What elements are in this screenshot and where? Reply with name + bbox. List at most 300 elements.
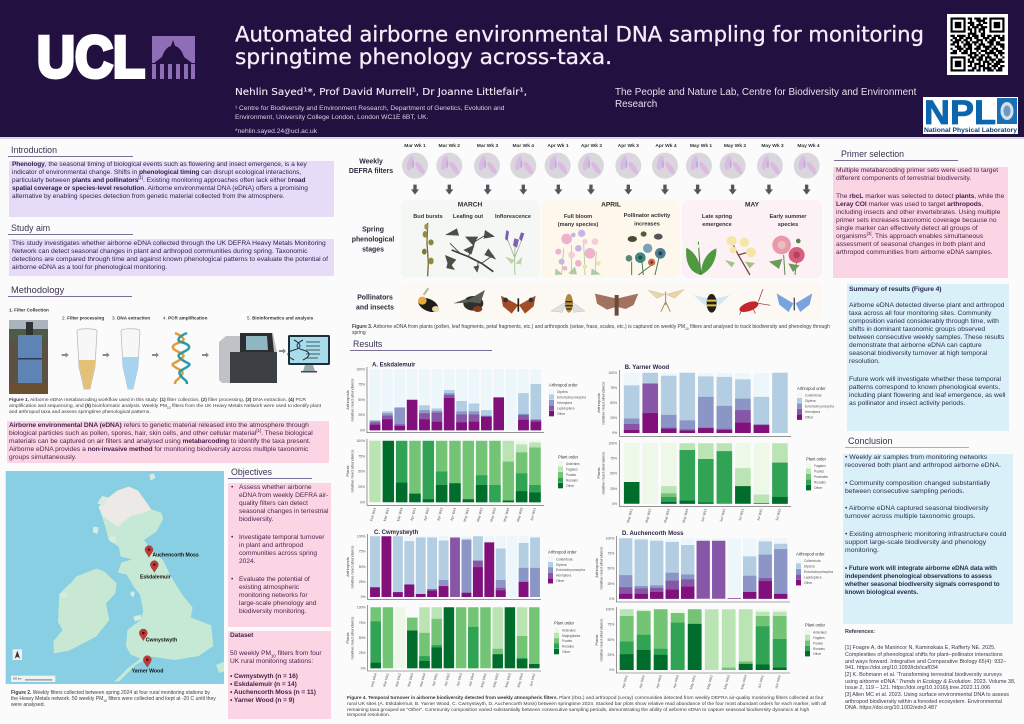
panel: dataset: Dataset <box>230 632 253 639</box>
row labels: stages <box>362 246 384 254</box>
panel: primer selection: Leray COI marker was used to target arthropods, <box>836 201 983 208</box>
tick labels B: 0% <box>612 431 617 435</box>
panel: summary of results: as pollinator and insect activity periods. <box>849 400 965 407</box>
x labels B: May Wk4 <box>682 508 689 523</box>
panel: introduction: particularly between plants and pollinators[1]. Existing monitoring approaches often lack either broad <box>12 175 305 184</box>
insect: red beetle <box>738 289 770 315</box>
legend: plant D: Fagales <box>813 636 825 640</box>
header band <box>0 0 1024 139</box>
tick labels A: 0% <box>360 428 365 432</box>
x labels A: Mar Wk1 <box>383 507 390 522</box>
panel: objectives: biodiversity monitoring. <box>239 608 306 615</box>
heading: introduction <box>8 144 133 157</box>
illustration: inflorescence <box>505 230 524 275</box>
legend: arthropod C: Diptera <box>556 563 567 567</box>
site labels: Auchencorth Moss <box>152 553 199 559</box>
affiliations <box>235 105 505 135</box>
panel: summary of results: between consecutive weekly samples. These results <box>849 334 1004 341</box>
tick labels C: 50% <box>359 565 366 569</box>
legend: plant B: Fagales <box>814 464 826 468</box>
x labels D: Apr Wk4 <box>672 675 680 689</box>
affiliations: *nehlin.sayed.24@ucl.ac.uk <box>235 128 318 135</box>
references: Complexities of phenological shifts for plant–pollinator interactions <box>845 652 1003 658</box>
legend: arthropod B: Other <box>805 416 814 420</box>
legend: arthropod D: Other <box>804 581 813 585</box>
site labels: Cwmystwyth <box>146 637 177 643</box>
tick labels B: 25% <box>610 487 617 491</box>
panel: objectives: Evaluate the potential of <box>239 576 310 583</box>
panel: airborne eDNA definition: materials can be captured on air filters and analysed using metabarcoding to identify the taxa present. <box>9 438 311 445</box>
tick labels A: 50% <box>358 398 365 402</box>
x labels C: Feb Wk4 <box>370 673 378 687</box>
y axis titles B <box>596 381 606 494</box>
heading: primer selection <box>834 148 958 161</box>
panel: objectives: Investigate temporal turnover <box>239 534 324 541</box>
panel: conclusion: support large-scale biodiversity and phenology <box>845 539 986 546</box>
month panels: increases <box>634 222 660 228</box>
arthropod bars D <box>626 538 781 599</box>
x labels C: May Wk1 <box>480 673 487 688</box>
panel: conclusion: whether seasonal biodiversity signals correspond to <box>845 581 1000 588</box>
tick labels A: 25% <box>358 485 365 489</box>
affiliations: ¹ Centre for Biodiversity and Environment Research, Department of Genetics, Evolution and <box>235 105 505 112</box>
panel: objectives: in plant and arthropod <box>239 542 303 549</box>
x labels D: May Wk2 <box>706 675 714 690</box>
legend: plant A: Asterales <box>566 462 580 466</box>
authors: Nehlin Sayed¹*, Prof David Murrell¹, Dr Joanne Littlefair¹, <box>235 87 527 98</box>
x labels B: Jun Wk1 <box>700 508 708 522</box>
x labels A: Jun Wk1 <box>530 507 537 521</box>
tick labels B: 50% <box>610 472 617 476</box>
row labels: and insects <box>356 304 394 312</box>
legend: plant C: Asterales <box>562 628 576 632</box>
week labels: May Wk 3 <box>761 143 784 149</box>
panel: conclusion: • Existing atmospheric monitoring infrastructure could <box>845 531 1006 538</box>
legend: plant C: Poales <box>562 639 572 643</box>
legend: arthropod C: Arthropod order <box>548 550 577 554</box>
month panels <box>401 200 822 320</box>
panel: conclusion: between consecutive sampling periods. <box>845 488 964 495</box>
panel: primer selection: different components of terrestrial biodiversity. <box>836 175 971 182</box>
x labels D <box>621 675 782 690</box>
panel: summary of results: Future work will investigate whether these temporal <box>849 376 1001 383</box>
y axis titles C: Plants <box>345 632 350 644</box>
site labels: Yarner Wood <box>132 668 163 674</box>
tick labels B <box>608 371 617 506</box>
NPL logo: National Physical Laboratory <box>924 127 1018 134</box>
caption: figure 4: remaining taxa grouped as "Other". Community composition varied substantially between consecutive sampling periods, demonstrating the ability of airborne eDNA to capture seasonal biodiversity dynamics at high <box>347 708 809 713</box>
references: and ways forward. Integrative and Comparative Biology 65(4): 932– <box>845 659 1006 665</box>
month panels: Pollinator activity <box>624 213 671 219</box>
y axis titles D: relative read abundance <box>598 618 604 661</box>
plant bars A <box>375 441 535 502</box>
legend: plant C <box>554 620 581 654</box>
tick labels D: 0% <box>609 597 614 601</box>
y axis titles B: Arthropods <box>596 393 601 413</box>
x labels C: May Wk4 <box>516 673 524 688</box>
legend: plant D: Other <box>813 652 822 656</box>
y axis titles D <box>594 546 604 661</box>
NPL logo: NPL <box>924 94 996 132</box>
tick labels C: 100% <box>357 606 366 610</box>
step labels <box>9 308 314 320</box>
title <box>235 22 924 69</box>
legend: plant B <box>806 456 828 490</box>
arthropod bars B <box>632 373 780 433</box>
legend: plant A: Rosales <box>566 478 578 482</box>
legend: arthropod A: Other <box>557 412 566 416</box>
panel: primer selection: including insects and other invertebrates. Using multiple <box>836 209 1000 216</box>
panel: objectives: quality filters can detect <box>239 500 308 507</box>
illustration: pollinator flowers <box>626 231 666 275</box>
panel: primer selection: assessment of seasonal changes in both plant and <box>836 241 985 248</box>
DNA helix <box>173 333 189 384</box>
affiliations: Environment, University College London, London WC1E 6BT, UK. <box>235 114 429 121</box>
row labels: Spring <box>362 226 384 234</box>
panel: summary of results: Summary of results (Figure 4) <box>849 286 941 293</box>
panel: dataset <box>228 631 331 719</box>
x labels A: Apr Wk2 <box>423 507 430 521</box>
tick labels C: 0% <box>361 666 366 670</box>
illustration: peonies <box>769 236 805 275</box>
site labels <box>132 553 199 674</box>
month panels: Bud bursts <box>413 214 443 220</box>
legend: arthropod B: Arthropod order <box>797 386 826 391</box>
panel: dataset: UK rural monitoring stations: <box>230 658 313 665</box>
week labels: May Wk 4 <box>797 143 820 149</box>
references: using airborne eDNA.' Trends in Ecology & Evolution. 2023. Volume 38, <box>845 679 1016 685</box>
y axis titles B: relative read abundance <box>600 451 606 494</box>
month panels: APRIL <box>601 202 621 208</box>
week labels: Apr Wk 4 <box>655 143 677 149</box>
tube: filter processing <box>77 329 97 389</box>
references: Issue 2, 119 – 121. https://doi.org/10.1016/j.tree.2022.11.006 <box>845 685 990 691</box>
chart A: Eskdalemuir <box>345 362 586 522</box>
legend: plant A: Poales <box>566 473 576 477</box>
panel: airborne eDNA definition: Airborne environmental DNA (eDNA) refers to genetic material released into the atmosphere through <box>9 422 309 429</box>
panel: summary of results: demonstrate that airborne eDNA can capture <box>849 342 982 349</box>
legend: arthropod D: Collembola <box>804 559 821 563</box>
legend: arthropod C: Other <box>556 579 565 583</box>
chart D: Auchencorth Moss <box>594 531 833 690</box>
tick labels B: 100% <box>608 442 617 446</box>
Great Britain <box>99 487 213 682</box>
x labels B: Jun Wk2 <box>719 508 726 522</box>
site pins <box>139 546 158 667</box>
legend: plant B: Plant order <box>806 456 827 462</box>
panel: dataset: • Auchencorth Moss (n = 11) <box>230 689 316 696</box>
axes C <box>368 534 541 671</box>
NPL logo <box>923 94 1018 134</box>
tick labels C: 100% <box>357 534 366 538</box>
chart C: Cwmystwyth <box>345 530 585 688</box>
figure 3: phenology timeline <box>349 143 822 320</box>
week labels: Mar Wk 1 <box>404 143 426 149</box>
legend: plant C: Malpighiales <box>562 634 581 638</box>
y axis titles D: Plants <box>594 634 599 646</box>
y axis titles B: Plants <box>596 467 601 479</box>
insect: hoverfly <box>551 294 585 313</box>
month panels: species <box>778 222 798 228</box>
x labels A: Apr Wk4 <box>450 507 457 521</box>
panel: conclusion: recovered both plant and arthropod airborne eDNA. <box>845 462 1001 469</box>
x labels C: Apr Wk2 <box>444 673 451 687</box>
x labels C: May Wk2 <box>492 673 500 688</box>
y axis titles A <box>345 378 354 492</box>
x labels C: May Wk3 <box>504 673 512 688</box>
insect: moth <box>595 294 638 316</box>
y axis titles C: relative read abundance <box>350 545 354 588</box>
chart C: Cwmystwyth: C. Cwmystwyth <box>374 530 419 536</box>
legend: arthropod B: Entomobryomorpha <box>805 404 834 408</box>
axes A <box>367 367 544 505</box>
panel: study aim <box>9 239 334 276</box>
panel: study aim: This study investigates whether airborne eDNA collected through the UK DEFRA Heavy Metals Monitoring <box>12 240 326 247</box>
x labels A: May Wk5 <box>516 507 524 522</box>
plant bars C <box>376 607 534 668</box>
panel: dataset: • Yarner Wood (n = 9) <box>230 697 294 704</box>
legend: plant A: Plant order <box>558 454 579 460</box>
scale and north arrow: 100 km <box>13 677 22 681</box>
x labels C: Mar Wk2 <box>395 673 402 687</box>
caption: figure 4: Figure 4. Temporal turnover in airborne biodiversity detected from weekly atmospheric filters. Plant (rbcL) and arthropod (Leray) communities detected from weekly DEFRA air-quality monitoring filters collected at four <box>347 696 824 701</box>
x labels C: Apr Wk3 <box>456 673 463 687</box>
x labels A <box>369 507 537 522</box>
process arrows <box>62 348 286 358</box>
tick labels D: 100% <box>606 608 614 612</box>
week labels: Apr Wk 2 <box>581 143 602 149</box>
tick labels B: 25% <box>610 416 617 420</box>
panel: primer selection: primer sets increases taxonomic coverage because no <box>836 217 997 224</box>
x labels D: Apr Wk2 <box>638 675 646 689</box>
legend: arthropod B <box>797 386 834 420</box>
caption: figure 2 <box>11 690 216 708</box>
heading: results: Results <box>353 339 382 349</box>
heading: objectives <box>228 466 312 479</box>
week labels: Mar Wk 3 <box>477 143 499 149</box>
panel: objectives: 2024. <box>239 558 256 565</box>
chart B: Yarner Wood <box>596 365 834 523</box>
sequencer <box>219 333 277 383</box>
panel: conclusion: • Community composition changed substantially <box>845 480 990 487</box>
panel: summary of results: taxa across all four monitoring sites. Community <box>849 310 991 317</box>
illustration: leafing out <box>445 228 496 273</box>
axes B <box>619 370 791 506</box>
row labels <box>349 158 394 312</box>
month panels: Inflorescence <box>495 214 531 220</box>
panel: summary of results: seasonal biodiversity turnover at high temporal <box>849 350 987 357</box>
legend: arthropod A: Entomobryomorpha <box>557 395 586 399</box>
insect: dark bee <box>453 290 485 312</box>
caption: figure 1: Figure 1. Airborne eDNA metabarcoding workflow used in this study: (1) filter collection, (2) filter processing, (3) DNA extraction, (4) PCR <box>9 398 306 403</box>
legend: plant D: Poales <box>813 641 823 645</box>
heading: study aim <box>8 222 133 235</box>
chart D: Auchencorth Moss: D. Auchencorth Moss <box>622 531 684 537</box>
panel: introduction: spatial coverage or species-level resolution. Airborne environmental DNA (eDNA) offers a promising <box>12 185 308 192</box>
step labels: 5. Bioinformatics and analysis <box>247 316 314 320</box>
legend: plant D <box>805 622 827 656</box>
y axis titles C: relative read abundance <box>350 616 354 659</box>
month panels: Leafing out <box>453 214 483 220</box>
caption: figure 4: temporal resolution. <box>347 713 390 718</box>
insect: peacock butterfly <box>501 296 536 314</box>
x labels C: Mar Wk3 <box>407 673 414 687</box>
legend: arthropod D: Lepidoptera <box>804 576 822 580</box>
caption: figure 2: Figure 2. Weekly filters collected between spring 2024 at four rural monitoring stations by <box>11 690 210 696</box>
title: springtime phenology across-taxa. <box>235 45 612 69</box>
y axis titles A: relative read abundance <box>350 449 354 492</box>
x labels D: May Wk3 <box>723 675 731 690</box>
tick labels D: 100% <box>606 536 614 540</box>
legend: plant A: Other <box>566 484 575 488</box>
tick labels D: 25% <box>608 653 614 657</box>
tick labels C: 0% <box>361 595 366 599</box>
x labels B: May Wk1 <box>626 508 634 523</box>
panel: objectives <box>228 483 331 627</box>
panel: conclusion <box>843 454 1013 624</box>
y axis titles C: Arthropods <box>345 557 350 577</box>
legend: plant D: Plant order <box>805 622 826 628</box>
panel: dataset: • Eskdalemuir (n = 14) <box>230 681 297 688</box>
Ireland <box>53 569 117 653</box>
x labels B <box>626 508 782 523</box>
legend: plant B: Proteales <box>814 475 828 479</box>
methodology workflow figure <box>9 308 330 394</box>
x labels A: Apr Wk3 <box>436 507 444 521</box>
references: DNA. https://doi.org/10.1002/edn3.487 <box>845 705 937 711</box>
x labels D: May Wk4 <box>740 675 748 690</box>
tick labels D: 50% <box>608 638 614 642</box>
x labels B: Jul Wk1 <box>738 508 745 521</box>
site labels: Eskdalemuir <box>140 575 171 581</box>
step labels: 4. PCR amplification <box>163 316 208 320</box>
panel: summary of results: patterns correspond to known phenological events, <box>849 384 1000 391</box>
week labels: Mar Wk 2 <box>439 143 460 149</box>
panel: introduction: alternative by enabling species detection from genetic material collected from the atmosphere. <box>12 193 285 200</box>
x labels A: May Wk1 <box>463 507 470 522</box>
panel: primer selection: arthropod communities from airborne eDNA samples. <box>836 249 992 256</box>
panel: conclusion: monitoring. <box>845 547 879 554</box>
x labels A: Mar Wk4 <box>396 507 404 522</box>
panel: introduction: indicator of environmental change. Shifts in phenological timing can disrupt ecological interactions, <box>12 169 301 176</box>
insect: blue butterfly <box>777 293 812 312</box>
legend: plant A: Fagales <box>566 468 578 472</box>
tick labels B: 50% <box>610 401 617 405</box>
x labels A: May Wk4 <box>503 507 510 522</box>
tick labels D: 0% <box>609 668 614 672</box>
y axis titles B: relative read abundance <box>600 381 606 424</box>
references: [2] K. Bohmann et al. 'Transforming terrestrial biodiversity surveys <box>845 672 1002 678</box>
caption: figure 2: the Heavy Metals network. 50 weekly PM10 filters were collected and kept at -20 C until they <box>11 696 216 703</box>
tick labels A: 0% <box>360 500 365 504</box>
panel: introduction: Phenology, the seasonal timing of biological events such as flowering and insect emergence, is a key <box>12 161 307 168</box>
week labels: Apr Wk 3 <box>618 143 639 149</box>
month panels: (many species) <box>558 222 598 228</box>
panel: objectives: • <box>231 576 233 583</box>
map: sampling sites <box>6 471 224 684</box>
panel: study aim: detections are compared through time and against known phenological patterns to evaluate the potential of <box>12 256 328 263</box>
caption: figure 1: and arthropod taxa and assess springtime phenological patterns. <box>9 410 151 415</box>
insect: bumblebee <box>416 288 441 315</box>
tick labels C: 25% <box>359 580 366 584</box>
legend: arthropod D: Entomobryomorpha <box>804 570 833 574</box>
panel: airborne eDNA definition: Airborne eDNA provides a non-invasive method for monitoring biodiversity across multiple taxonomic <box>9 446 308 453</box>
panel: conclusion: • Weekly air samples from monitoring networks <box>845 454 987 461</box>
legend: arthropod C: Hemiptera <box>556 574 571 578</box>
title: Automated airborne environmental DNA sampling for monitoring <box>235 22 924 46</box>
lab name: Research <box>615 99 657 110</box>
legend: plant D: Asterales <box>813 630 827 634</box>
illustration: bud bursts <box>422 223 434 276</box>
panel: objectives: large-scale phenology and <box>239 600 316 607</box>
y axis titles A: Plants <box>345 465 350 477</box>
x labels D: Apr Wk1 <box>621 675 629 689</box>
legend: arthropod A: Diptera <box>557 390 568 394</box>
tick labels A <box>356 368 365 504</box>
legend: plant C: Rosales <box>562 644 574 648</box>
legend: arthropod A: Arthropod order <box>549 382 578 388</box>
legend: arthropod D: Diptera <box>804 564 815 568</box>
caption: figure 3: spring <box>352 330 366 336</box>
x labels C: Apr Wk1 <box>431 673 439 687</box>
panel: dataset: • Cwmystwyth (n = 16) <box>230 673 298 680</box>
legend: arthropod A: Hemiptera <box>557 401 572 405</box>
x labels C <box>370 673 536 688</box>
x labels B: Jul Wk2 <box>756 508 763 521</box>
QR code <box>947 14 1008 75</box>
y axis titles D: relative read abundance <box>598 546 604 589</box>
y axis titles D: Arthropods <box>594 558 599 578</box>
row labels: Weekly <box>359 158 383 166</box>
panel: primer selection: organisms[3]. This approach enables simultaneous <box>836 231 983 240</box>
week labels: Apr Wk 1 <box>547 143 569 149</box>
legend: arthropod C: Entomobryomorpha <box>556 568 585 572</box>
legend: arthropod B: Hemiptera <box>805 410 820 414</box>
x labels A: May Wk2 <box>476 507 484 522</box>
panel: objectives: biodiversity. <box>239 516 273 523</box>
row labels: Pollinators <box>357 294 393 302</box>
row labels: phenological <box>352 236 394 244</box>
chart A: Eskdalemuir: A. Eskdalemuir <box>372 362 416 368</box>
x labels B: Jul Wk3 <box>775 508 782 521</box>
caption: figure 3 <box>352 324 830 336</box>
panel: airborne eDNA definition <box>7 421 329 463</box>
lab name <box>615 87 917 110</box>
legend: plant C: Plant order <box>554 620 575 626</box>
heading: study aim: Study aim <box>11 223 50 233</box>
illustration: lily of the valley <box>686 237 717 275</box>
legend: plant B: Poales <box>814 470 824 474</box>
UCL logo: UCL <box>37 25 145 90</box>
legend: plant C: Other <box>562 650 571 654</box>
week labels: May Wk 2 <box>724 143 746 149</box>
x labels C: Apr Wk4 <box>468 673 475 687</box>
y axis titles C <box>345 545 354 659</box>
references: 941. https://doi.org/10.1093/icb/icaf034 <box>845 665 938 671</box>
panel: primer selection: Multiple metabarcoding primer sets were used to target <box>836 167 998 174</box>
monitor with DNA sequence <box>288 335 330 372</box>
panel: objectives: seasonal changes in terrestrial <box>239 508 328 515</box>
photo of filter collector <box>9 320 48 394</box>
legend: arthropod A <box>549 382 586 416</box>
x labels C: Jun Wk1 <box>529 673 536 687</box>
heading: methodology <box>8 284 132 297</box>
row labels: DEFRA filters <box>349 168 393 175</box>
panel: primer selection: single marker can effectively detect all groups of <box>836 225 978 232</box>
heading: primer selection: Primer selection <box>841 149 904 159</box>
caption: figure 1 <box>9 398 321 415</box>
month panels: emergence <box>702 222 732 228</box>
